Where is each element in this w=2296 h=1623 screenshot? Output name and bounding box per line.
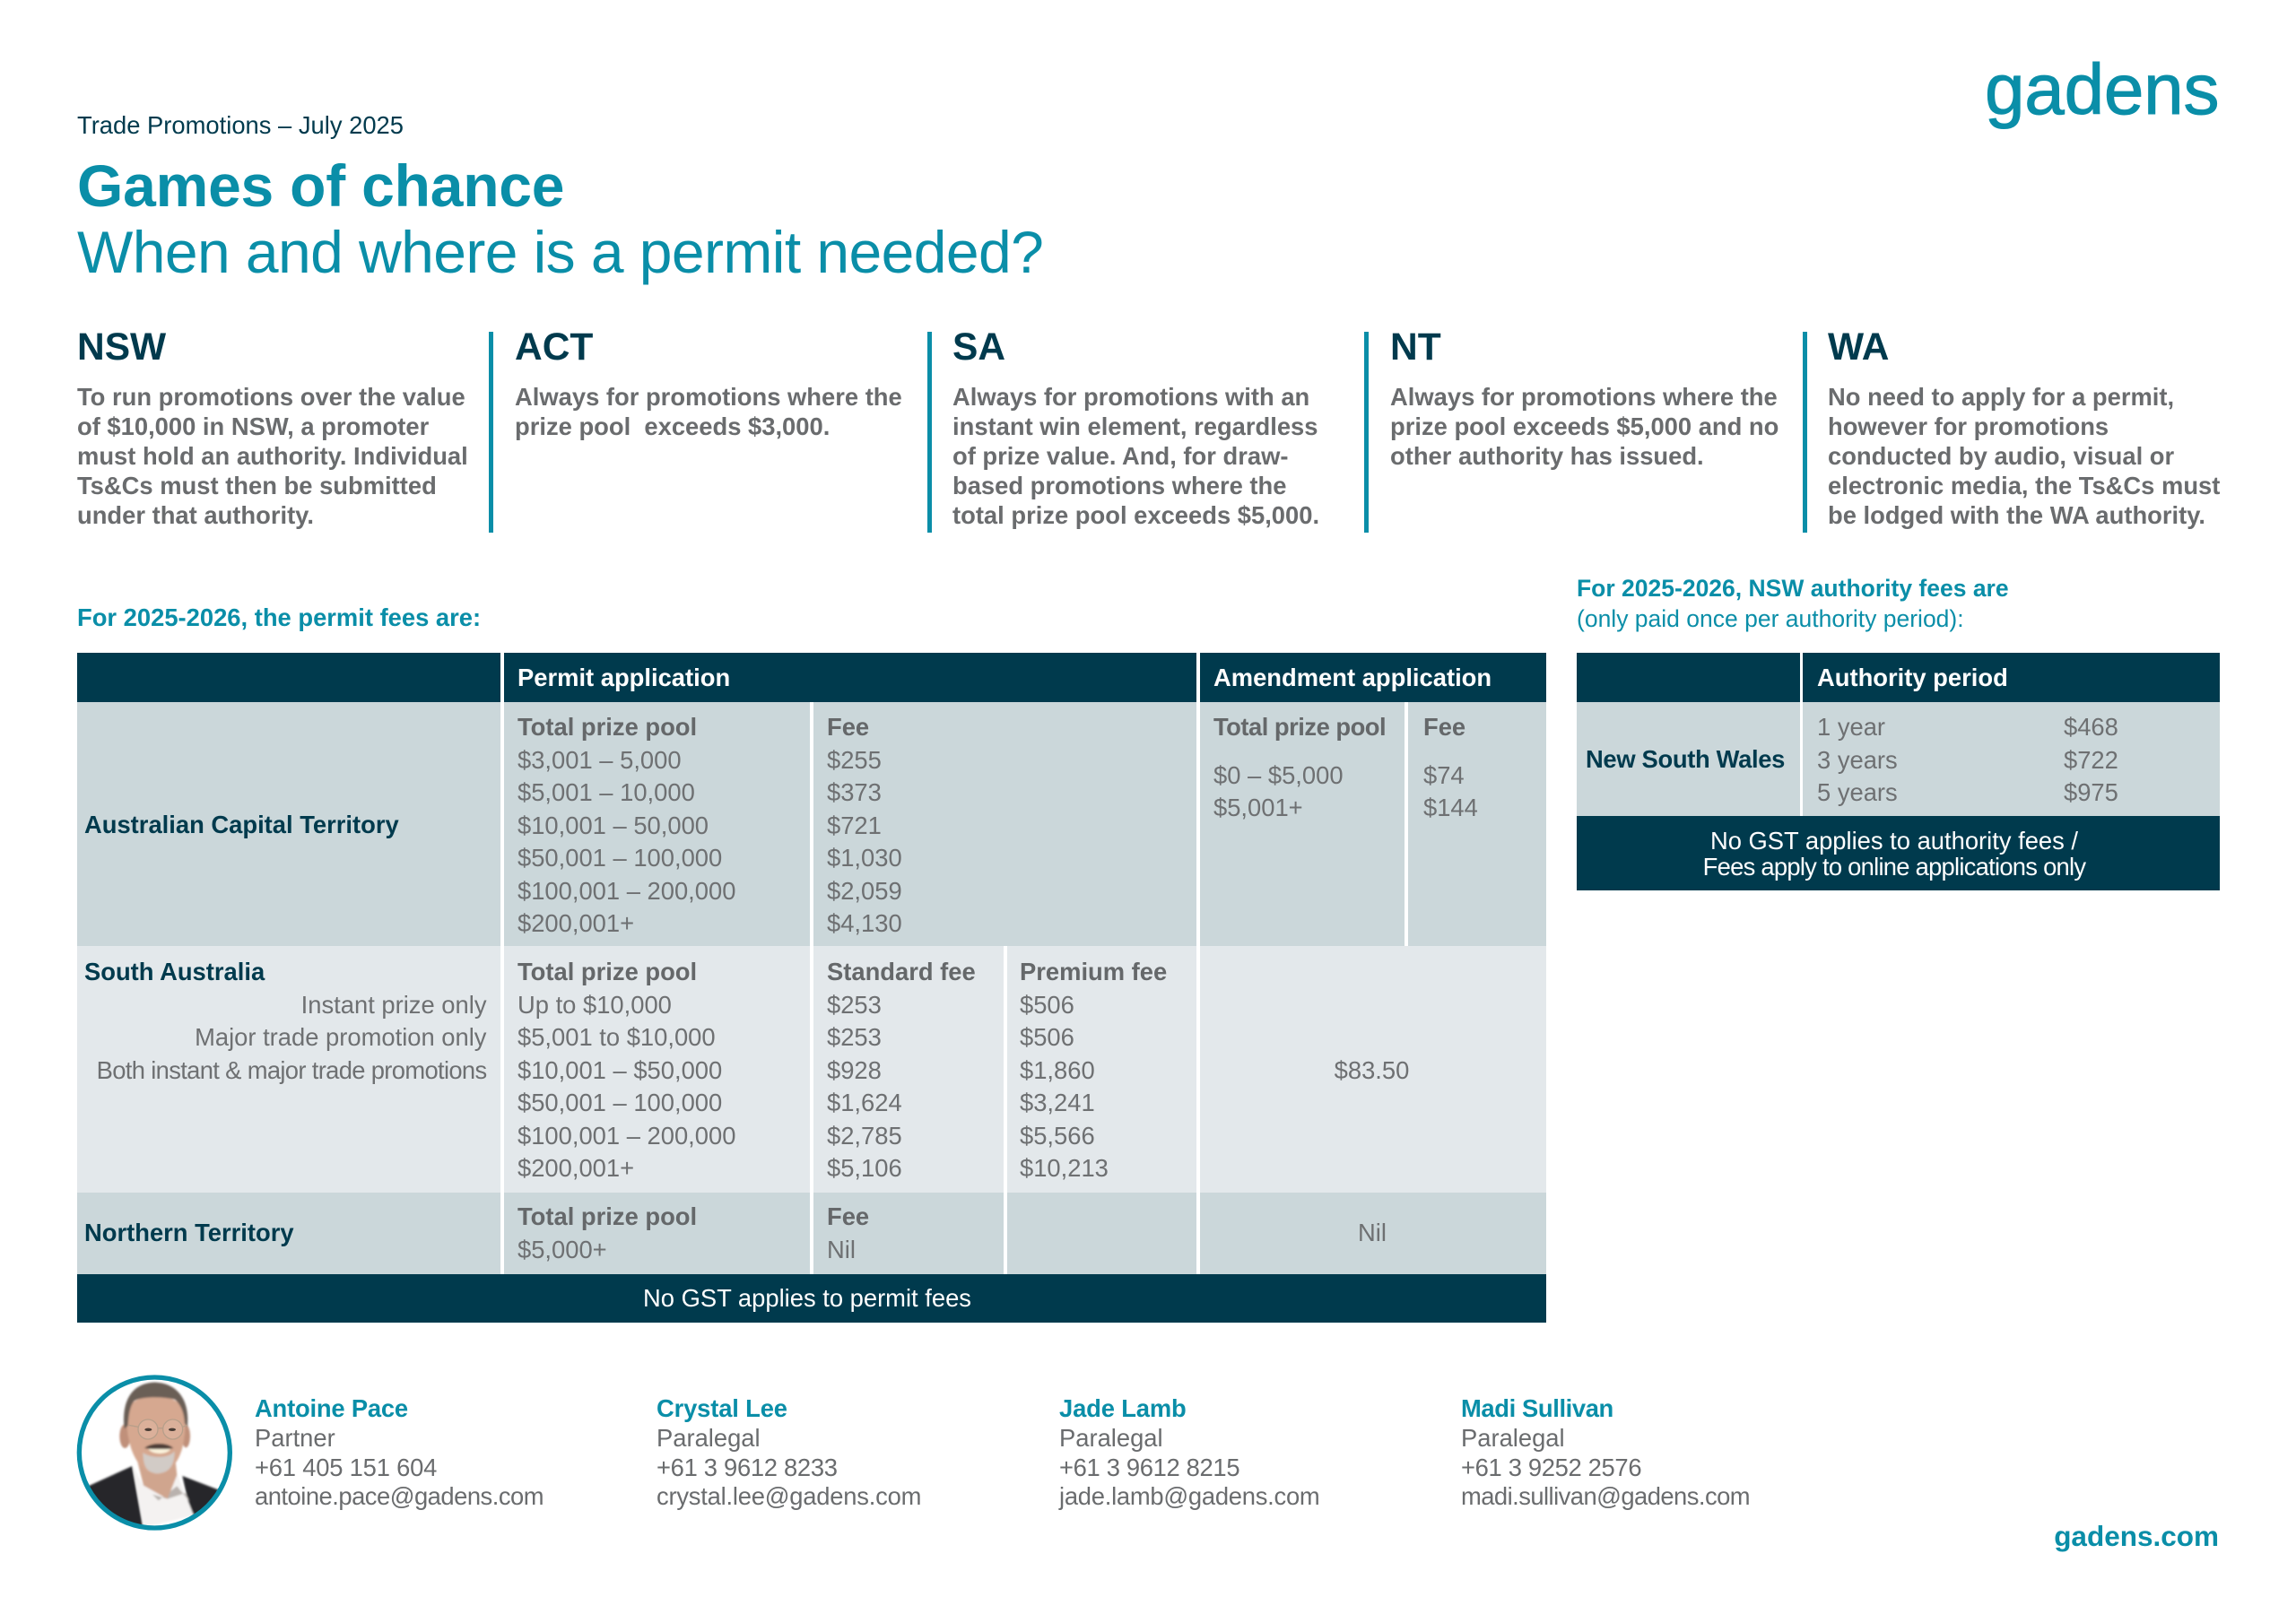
SA prize pool column: $50,001 – 100,000 [517, 1089, 722, 1116]
text: NSW [77, 383, 468, 529]
SA prize pool column: $200,001+ [517, 1154, 634, 1182]
contact: Jade Lamb: jade.lamb@gadens.com [1059, 1482, 1319, 1510]
text: WA: be lodged with the WA authority. [1828, 501, 2205, 529]
authority periods [1817, 713, 1898, 806]
header: authority period: Authority period [1817, 664, 2008, 691]
authority periods: 1 year [1817, 713, 1885, 741]
contact: Crystal Lee [657, 1394, 921, 1510]
ACT amendment fee: Fee $74 [1423, 713, 1465, 789]
SA premium fee column: $1,860 [1020, 1056, 1095, 1083]
contact: Jade Lamb: +61 3 9612 8215 [1059, 1454, 1239, 1481]
text: SA [952, 383, 1319, 529]
SA premium fee column: $506 [1020, 990, 1074, 1019]
website link: gadens.com [2054, 1520, 2219, 1552]
SA premium fee column: $3,241 [1020, 1089, 1095, 1116]
contact: Madi Sullivan: madi.sullivan@gadens.com [1461, 1482, 1750, 1510]
contact: Crystal Lee: crystal.lee@gadens.com [657, 1482, 921, 1510]
text: SA: based promotions where the [952, 472, 1286, 499]
authority footer note: Fees apply to online applications only [1703, 853, 2085, 881]
document label: Trade Promotions – July 2025 [77, 111, 404, 139]
text: NSW: must hold an authority. Individual [77, 442, 468, 470]
text: WA: conducted by audio, visual or [1828, 442, 2174, 470]
text: WA: however for promotions [1828, 412, 2109, 440]
authority footer note [1703, 827, 2086, 881]
row label: Northern Territory: Northern Territory [84, 1219, 294, 1246]
gadens logo: gadens [1985, 49, 2219, 129]
panel: WA [1828, 326, 2220, 529]
text: NSW: Ts&Cs must then be submitted [77, 472, 437, 499]
authority footer note: No GST applies to authority fees / [1710, 827, 2078, 855]
SA premium fee column [1020, 958, 1167, 1182]
NT amendment fee: Nil [1358, 1219, 1387, 1246]
authority periods: 5 years [1817, 778, 1898, 806]
heading: NSW authority fees: (only paid once per authority period): [1577, 604, 1964, 631]
text: ACT [515, 383, 902, 440]
row label: South Australia: South Australia [84, 958, 265, 985]
SA promotion types: Major trade promotion only [195, 1023, 486, 1051]
ACT fee column: $373 [827, 778, 882, 806]
authority fees: $975 [2064, 778, 2118, 806]
panel: NSW [77, 326, 468, 529]
ACT prize pool column: $100,001 – 200,000 [517, 877, 735, 904]
title [77, 152, 1043, 285]
SA standard fee column: $5,106 [827, 1154, 902, 1182]
contact: Madi Sullivan [1461, 1394, 1750, 1510]
SA prize pool column [517, 958, 735, 1182]
panel: ACT [515, 326, 902, 440]
text: NT [1390, 383, 1779, 470]
text: ACT: Always for promotions where the [515, 383, 902, 411]
ACT amendment prize pool: $5,001+ [1213, 794, 1303, 821]
NT fee column: Nil [827, 1236, 856, 1263]
SA prize pool column: $100,001 – 200,000 [517, 1121, 735, 1150]
text: NT: prize pool exceeds $5,000 and no [1390, 412, 1779, 440]
title: Games of chance [77, 152, 564, 219]
SA standard fee column: $253 [827, 990, 882, 1019]
text: NSW: under that authority. [77, 501, 314, 529]
ACT prize pool column: $50,001 – 100,000 [517, 844, 722, 872]
heading: WA: WA [1828, 326, 1889, 369]
text: SA: of prize value. And, for draw- [952, 442, 1288, 470]
ACT fee column: $255 [827, 746, 882, 773]
NT prize pool column [517, 1202, 697, 1263]
text: WA: No need to apply for a permit, [1828, 383, 2174, 411]
text: SA: total prize pool exceeds $5,000. [952, 501, 1319, 529]
SA prize pool column: Up to $10,000 [517, 990, 672, 1019]
SA standard fee column: $2,785 [827, 1121, 902, 1150]
SA premium fee column: $10,213 [1020, 1154, 1109, 1182]
portrait: Antoine Pace [77, 1375, 232, 1531]
heading: NSW authority fees [1577, 575, 2009, 631]
contact: Crystal Lee: Crystal Lee [657, 1394, 787, 1422]
header: permit application: Permit application [517, 664, 730, 691]
contact: Jade Lamb: Paralegal [1059, 1424, 1163, 1452]
heading: NT: NT [1390, 326, 1441, 369]
text: NT: other authority has issued. [1390, 442, 1704, 470]
NT fee column: Fee [827, 1202, 869, 1230]
NT prize pool column: Total prize pool [517, 1202, 697, 1230]
heading: ACT: ACT [515, 326, 593, 369]
contact: Antoine Pace: Antoine Pace [255, 1394, 408, 1422]
panel: SA [952, 326, 1319, 529]
ACT fee column: Fee [827, 713, 869, 741]
ACT fee column: $721 [827, 811, 882, 839]
contact: Antoine Pace [255, 1394, 544, 1510]
SA promotion types: Instant prize only [301, 990, 486, 1019]
heading: NSW: NSW [77, 326, 166, 369]
ACT prize pool column: $5,001 – 10,000 [517, 778, 695, 806]
ACT amendment fee: $144 [1423, 794, 1478, 821]
heading: SA: SA [952, 326, 1005, 369]
authority fees: $468 [2064, 713, 2118, 741]
SA prize pool column: $10,001 – $50,000 [517, 1056, 722, 1083]
SA premium fee column: $5,566 [1020, 1121, 1095, 1150]
text: NSW: of $10,000 in NSW, a promoter [77, 412, 429, 440]
table: permit fees [77, 653, 1546, 1323]
SA promotion types: Both instant & major trade promotions [97, 1056, 486, 1083]
contact: Jade Lamb: Jade Lamb [1059, 1394, 1187, 1422]
ACT fee column: $1,030 [827, 844, 902, 872]
contact: Jade Lamb [1058, 1394, 1319, 1510]
SA prize pool column: Total prize pool [517, 958, 697, 985]
SA standard fee column: Standard fee [827, 958, 976, 985]
table footer note: No GST applies to permit fees [643, 1284, 971, 1312]
panel: NT [1390, 326, 1779, 470]
ACT fee column: $4,130 [827, 909, 902, 937]
contact: Antoine Pace: Partner [255, 1424, 335, 1452]
NT fee column [827, 1202, 869, 1263]
title: When and where is a permit needed? [77, 219, 1043, 285]
ACT prize pool column: $10,001 – 50,000 [517, 811, 709, 839]
ACT fee column: $2,059 [827, 877, 902, 904]
ACT amendment fee [1423, 713, 1478, 821]
SA premium fee column: $506 [1020, 1023, 1074, 1051]
ACT prize pool column [517, 713, 735, 937]
SA prize pool column: $5,001 to $10,000 [517, 1023, 716, 1051]
ACT prize pool column: Total prize pool [517, 713, 697, 741]
table: NSW authority fees [1577, 653, 2220, 890]
heading: NSW authority fees: For 2025-2026, NSW authority fees are [1577, 575, 2009, 602]
contact: Antoine Pace: +61 405 151 604 [255, 1454, 437, 1481]
ACT amendment prize pool [1213, 713, 1386, 821]
authority periods: 3 years [1817, 746, 1898, 773]
SA amendment fee: $83.50 [1335, 1056, 1409, 1083]
text: SA: instant win element, regardless [952, 412, 1318, 440]
ACT amendment prize pool: Total prize pool $0 – $5,000 [1213, 713, 1386, 789]
contact: Crystal Lee: Paralegal [657, 1424, 761, 1452]
NT prize pool column: $5,000+ [517, 1236, 607, 1263]
row label: New South Wales: New South Wales [1586, 745, 1785, 773]
authority fees [2064, 713, 2118, 806]
text: NSW: To run promotions over the value [77, 383, 465, 411]
SA promotion types [97, 990, 486, 1084]
SA standard fee column [827, 958, 976, 1182]
SA premium fee column: Premium fee [1020, 958, 1167, 985]
SA standard fee column: $253 [827, 1023, 882, 1051]
ACT prize pool column: $200,001+ [517, 909, 634, 937]
ACT prize pool column: $3,001 – 5,000 [517, 746, 682, 773]
ACT fee column [827, 713, 902, 937]
header: amendment application: Amendment application [1213, 664, 1492, 691]
contact: Antoine Pace: antoine.pace@gadens.com [255, 1482, 544, 1510]
text: WA: electronic media, the Ts&Cs must [1828, 472, 2220, 499]
SA standard fee column: $1,624 [827, 1089, 902, 1116]
authority fees: $722 [2064, 746, 2118, 773]
row label: Australian Capital Territory: Australian Capital Territory [84, 811, 399, 838]
text: WA [1828, 383, 2220, 529]
contact: Madi Sullivan: +61 3 9252 2576 [1461, 1454, 1641, 1481]
SA standard fee column: $928 [827, 1056, 882, 1083]
heading: permit fees: For 2025-2026, the permit fees are: [77, 603, 481, 631]
text: NT: Always for promotions where the [1390, 383, 1778, 411]
contact: Crystal Lee: +61 3 9612 8233 [657, 1454, 838, 1481]
contact: Madi Sullivan: Paralegal [1461, 1424, 1565, 1452]
text: ACT: prize pool exceeds $3,000. [515, 412, 830, 440]
text: SA: Always for promotions with an [952, 383, 1309, 411]
contact: Madi Sullivan: Madi Sullivan [1461, 1394, 1613, 1422]
